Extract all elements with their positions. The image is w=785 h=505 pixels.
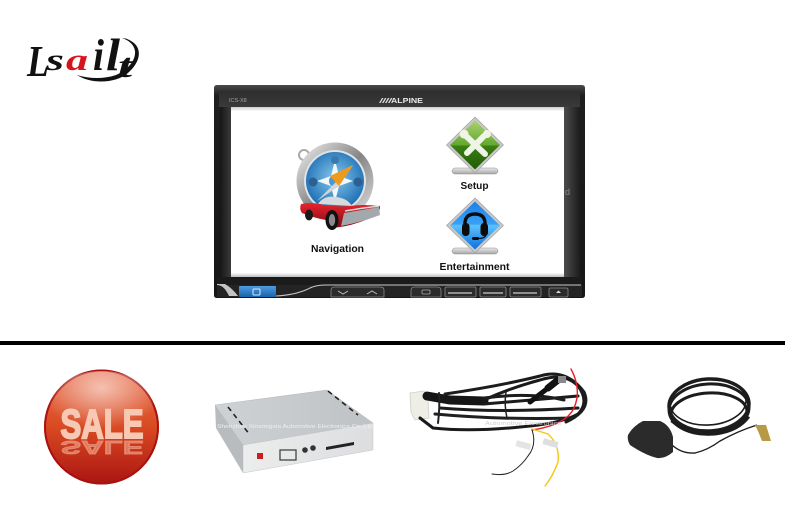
logo: Lsailt: t bbox=[118, 48, 134, 85]
brand label: ALPINE bbox=[391, 98, 423, 105]
product: wiring harness bbox=[410, 369, 586, 486]
logo: Lsailt: s bbox=[45, 42, 64, 77]
model label: ICS-X8 bbox=[229, 98, 247, 104]
logo: Lsailt: i bbox=[93, 31, 105, 80]
bezel sides bbox=[219, 92, 580, 277]
icon: red SALE badge bbox=[44, 370, 159, 484]
logo: Lsailt: a bbox=[66, 42, 88, 77]
product: navigation box bbox=[215, 390, 373, 473]
control strip bbox=[217, 277, 582, 297]
icon: compass and red car bbox=[296, 142, 380, 230]
arrow buttons bbox=[331, 287, 384, 297]
SALE text: SALE bbox=[60, 401, 144, 447]
button glyphs bbox=[448, 292, 537, 294]
label: Entertainment: Entertainment bbox=[440, 261, 510, 273]
SALE reflection: SALE bbox=[60, 437, 143, 458]
watermark remnant on bezel: d bbox=[565, 187, 570, 197]
divider bar bbox=[0, 341, 785, 345]
function buttons bbox=[411, 287, 568, 297]
product: GPS antenna bbox=[628, 377, 771, 458]
icon: entertainment diamond bbox=[446, 198, 504, 254]
label: Navigation: Navigation bbox=[311, 243, 364, 255]
logo: Lsailt: l bbox=[106, 29, 120, 80]
logo: Lsailt: L bbox=[26, 37, 49, 86]
icon: setup diamond bbox=[446, 117, 504, 174]
brand label bbox=[379, 98, 423, 105]
logo: Lsailt bbox=[26, 29, 139, 86]
head unit casing bbox=[214, 85, 585, 298]
product: navigation box: Shenzhen Xinsongxia Automotive Electronics Co.,Ltd bbox=[217, 424, 373, 430]
label: Setup: Setup bbox=[460, 180, 488, 192]
screen bbox=[231, 107, 564, 277]
home button bbox=[239, 286, 276, 297]
head unit bbox=[214, 85, 585, 298]
product: wiring harness: Automotive Electronics bbox=[485, 421, 561, 427]
